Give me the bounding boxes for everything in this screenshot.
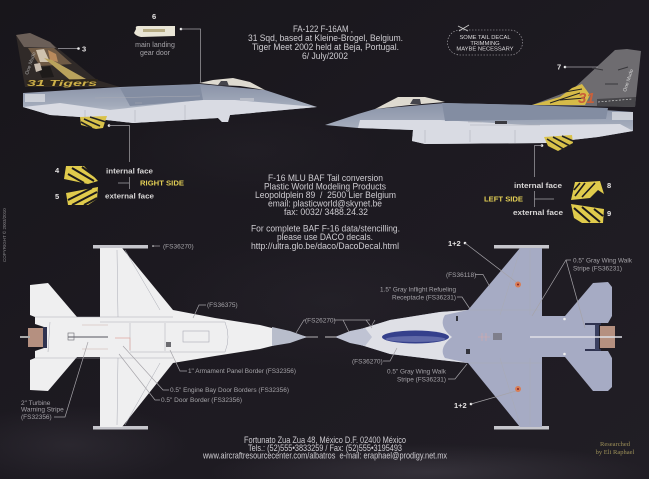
canopy left side xyxy=(375,97,445,109)
callout: right side decals: external face xyxy=(105,194,154,200)
callout 6: main landing gear door: main landing xyxy=(135,42,175,49)
callout 6: main landing gear door: 6 xyxy=(152,12,156,21)
tail art right side: One Mudo xyxy=(24,51,38,76)
labels: bottom plan view: Stripe (FS36231) xyxy=(573,266,622,272)
tail art left side: 31 xyxy=(578,90,595,107)
labels: top plan view: 0.5" Door Border (FS32356) xyxy=(161,397,242,404)
callout: left side decals: external face xyxy=(513,210,563,217)
labels: top plan view: (FS36375) xyxy=(207,302,238,309)
labels: bottom plan view: 1+2 xyxy=(448,239,461,248)
labels: bottom plan view xyxy=(334,239,633,410)
callout: left side decals: 8 xyxy=(607,181,611,190)
labels: top plan view: 2" Turbine xyxy=(21,400,51,407)
callout 6: main landing gear door xyxy=(134,12,200,83)
receptacle/blue canopy xyxy=(382,330,449,344)
contact text block: Plastic World Modeling Products xyxy=(264,182,386,192)
decal 4 xyxy=(64,166,98,184)
labels: bottom plan view: 0.5" Gray Wing Walk xyxy=(573,258,633,264)
callout: right side decals: 4 xyxy=(55,166,60,175)
tail art right side xyxy=(16,33,120,88)
callout: left side decals: LEFT SIDE xyxy=(484,196,523,204)
labels: top plan view: (FS26270) xyxy=(305,318,336,324)
airframe bottom xyxy=(335,248,612,427)
decal 9 xyxy=(571,204,604,223)
labels: bottom plan view: (FS36270) xyxy=(352,358,383,366)
labels: top plan view: 0.5" Engine Bay Door Borders (FS32356) xyxy=(170,387,289,394)
contact text block: please use DACO decals. xyxy=(277,232,373,243)
side view: left side jet xyxy=(325,49,641,144)
researched by credit xyxy=(596,441,635,456)
fuselage left side xyxy=(325,103,633,144)
contact text block: Leopoldplein 89 / 2500 Lier Belgium xyxy=(255,190,396,201)
callout: right side decals: internal face xyxy=(106,168,153,176)
researched by credit: Researched xyxy=(600,441,631,448)
labels: top plan view: 1" Armament Panel Border (FS32356) xyxy=(188,368,296,375)
callout 6: main landing gear door: gear door xyxy=(140,50,171,57)
plan view: top xyxy=(20,245,318,430)
decal 8 xyxy=(571,181,604,200)
callout: right side decals: RIGHT SIDE xyxy=(140,180,184,188)
researched by credit: by Eli Raphael xyxy=(596,449,635,456)
canopy right side xyxy=(199,78,265,90)
labels: bottom plan view: 1+2 xyxy=(454,401,467,410)
panel lines top xyxy=(35,250,228,425)
contact text block: For complete BAF F-16 data/stencilling. xyxy=(251,224,400,234)
roundels xyxy=(515,282,521,288)
exhaust xyxy=(28,328,43,347)
ventral fin right side xyxy=(80,116,107,129)
tail art right side: 31 Tigers xyxy=(27,79,98,88)
forebody xyxy=(335,310,468,363)
labels: top plan view: (FS32356) xyxy=(21,414,52,421)
callout 3: 3 xyxy=(82,44,86,54)
decal 5 xyxy=(66,187,98,205)
radome xyxy=(272,327,307,346)
header text: 31 Sqd, based at Kleine-Brogel, Belgium. xyxy=(248,33,403,44)
contact text block: http://ultra.glo.be/daco/DacoDecal.html xyxy=(251,241,399,252)
contact text block: F-16 MLU BAF Tail conversion xyxy=(268,173,383,184)
footer text: Tels.: (52)555•3833259 / Fax: (52)555•3195493 xyxy=(248,443,402,454)
note: tail decal trimming: MAYBE NECESSARY xyxy=(456,46,514,52)
copyright: COPYRIGHT © 2003/2010 xyxy=(1,208,7,262)
labels: top plan view: Warning Stripe xyxy=(21,406,64,414)
fuselage right side xyxy=(23,84,317,123)
labels: bottom plan view: Receptacle (FS36231) xyxy=(392,294,456,302)
header text xyxy=(248,24,403,62)
panel lines bottom xyxy=(470,250,542,425)
labels: bottom plan view: 1.5" Gray Inflight Refueling xyxy=(380,286,456,294)
labels: bottom plan view: (FS36118) xyxy=(446,272,476,279)
callout 7 xyxy=(557,62,598,72)
header text: Tiger Meet 2002 held at Beja, Portugal. xyxy=(252,42,399,53)
footer text: www.aircraftresourcecenter.com/albatros e-mail: eraphael@prodigy.net.mx xyxy=(202,450,447,462)
callout: left side decals: 9 xyxy=(607,209,611,218)
exhaust bottom xyxy=(600,326,615,348)
header text: FA-122 F-16AM , xyxy=(293,24,353,35)
labels: top plan view xyxy=(21,244,336,421)
airframe top xyxy=(30,248,308,427)
callout 3 xyxy=(58,44,86,54)
note: tail decal trimming xyxy=(448,25,522,55)
callout: right side decals: 5 xyxy=(55,192,59,201)
labels: top plan view: (FS36270) xyxy=(163,244,194,250)
side view: right side jet xyxy=(16,33,317,123)
wing tip rails xyxy=(93,245,148,248)
header text: 6/ July/2002 xyxy=(302,51,348,62)
tail art left side: One Mudo xyxy=(622,68,635,93)
callout 7: 7 xyxy=(557,62,561,72)
ventral fin left side xyxy=(544,135,573,151)
labels: bottom plan view: Stripe (FS36231) xyxy=(397,376,446,384)
note: tail decal trimming: SOME TAIL DECAL xyxy=(459,35,511,41)
contact text block: fax: 0032/ 3488.24.32 xyxy=(284,207,368,218)
contact text block: email: plasticworld@skynet.be xyxy=(268,198,382,210)
callout: right side decals xyxy=(55,124,184,205)
contact text block xyxy=(251,173,400,252)
labels: bottom plan view: 0.5" Gray Wing Walk xyxy=(387,368,447,376)
note: tail decal trimming: TRIMMING xyxy=(470,41,500,47)
tail art left side xyxy=(532,49,641,107)
callout: left side decals: internal face xyxy=(514,183,562,190)
callout: left side decals xyxy=(484,144,611,223)
footer text: Fortunato Zua Zua 48, México D.F. 02400 México xyxy=(244,435,406,446)
footer text xyxy=(202,435,447,462)
plan view: bottom xyxy=(325,245,622,430)
